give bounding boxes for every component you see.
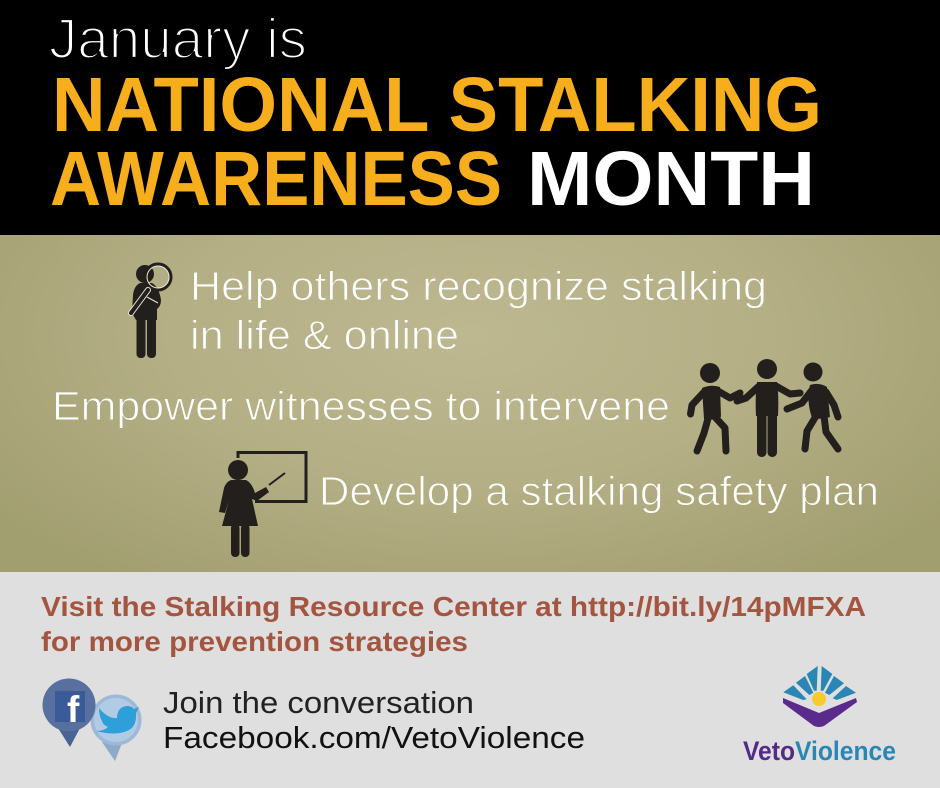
text: recognize stalking: in life & online [190,312,459,358]
call to action: for more prevention strategies [41,626,468,657]
call to action: Visit the Stalking Resource Center at http://bit.ly/14pMFXA [41,591,866,622]
text: join the conversation [163,685,585,755]
text: recognize stalking [190,263,767,358]
title line 1: NATIONAL STALKING [52,62,822,148]
logo: VetoViolence [743,666,896,766]
icon: person with magnifying glass [131,264,171,358]
text: recognize stalking: Help others recognize stalking [190,263,767,309]
icon: facebook bubble [42,678,96,747]
text: empower witnesses: Empower witnesses to intervene [52,383,670,429]
call to action [41,591,866,657]
panel: strategies [0,235,940,572]
icon: three people intervening [690,359,838,457]
icon: teacher at board [219,452,306,557]
title line 2: AWARENESS [50,136,502,222]
title intro: January is [49,7,307,71]
icon: twitter bubble [90,694,142,761]
text: safety plan: Develop a stalking safety plan [319,468,879,514]
icon: facebook bubble: f [67,689,80,730]
logo: VetoViolence: Veto [743,736,795,766]
panel: title banner [0,0,940,235]
text: join the conversation: Join the conversation [163,685,474,720]
text: join the conversation: Facebook.com/VetoViolence [163,720,585,755]
title month: MONTH [527,136,815,222]
panel: footer [0,572,940,788]
logo: VetoViolence: Violence [795,736,896,766]
